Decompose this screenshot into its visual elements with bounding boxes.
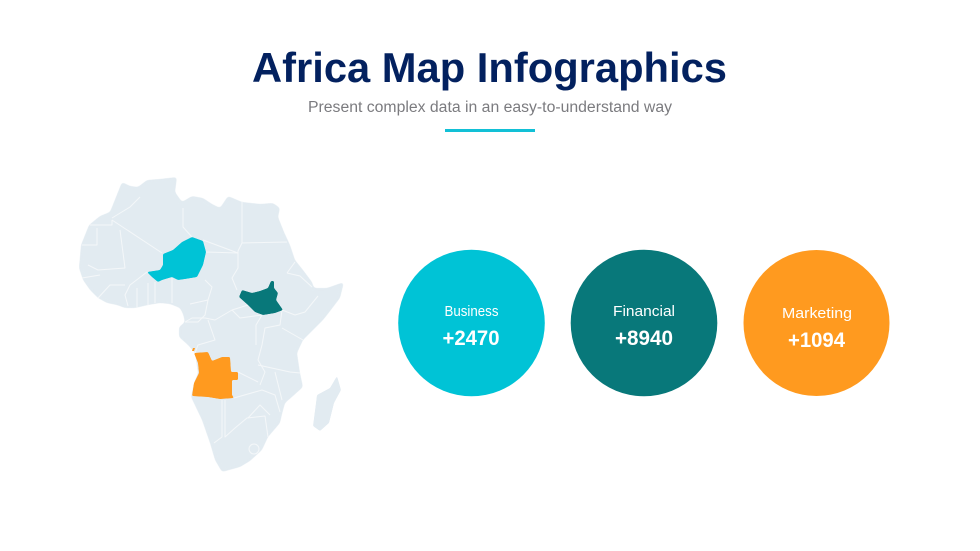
stat circle: Marketing: +1094: [788, 329, 845, 352]
stat circle: Financial: [571, 250, 717, 396]
stat circle: Financial: Financial: [613, 304, 675, 320]
title: Africa Map Infographics: [252, 44, 727, 91]
subtitle: Present complex data in an easy-to-understand way: [308, 99, 672, 116]
map: Angola highlighted: [192, 352, 238, 399]
map: Madagascar: [313, 376, 341, 431]
stat circle: Business: [398, 250, 545, 396]
map: continent base: [79, 177, 344, 472]
map: Niger highlighted: [147, 237, 206, 282]
map: Cabinda exclave: [192, 348, 195, 351]
accent underline: [445, 129, 535, 132]
stat circle: Business: +2470: [442, 327, 500, 350]
map: South Sudan highlighted: [239, 281, 283, 315]
stat circle: Financial: +8940: [615, 327, 673, 350]
map: Africa: [79, 177, 344, 472]
stat circle: Business: Business: [444, 304, 498, 320]
stat circle: Marketing: [744, 250, 890, 396]
stat circle: Marketing: Marketing: [782, 306, 852, 322]
map: country borders: [82, 197, 318, 454]
